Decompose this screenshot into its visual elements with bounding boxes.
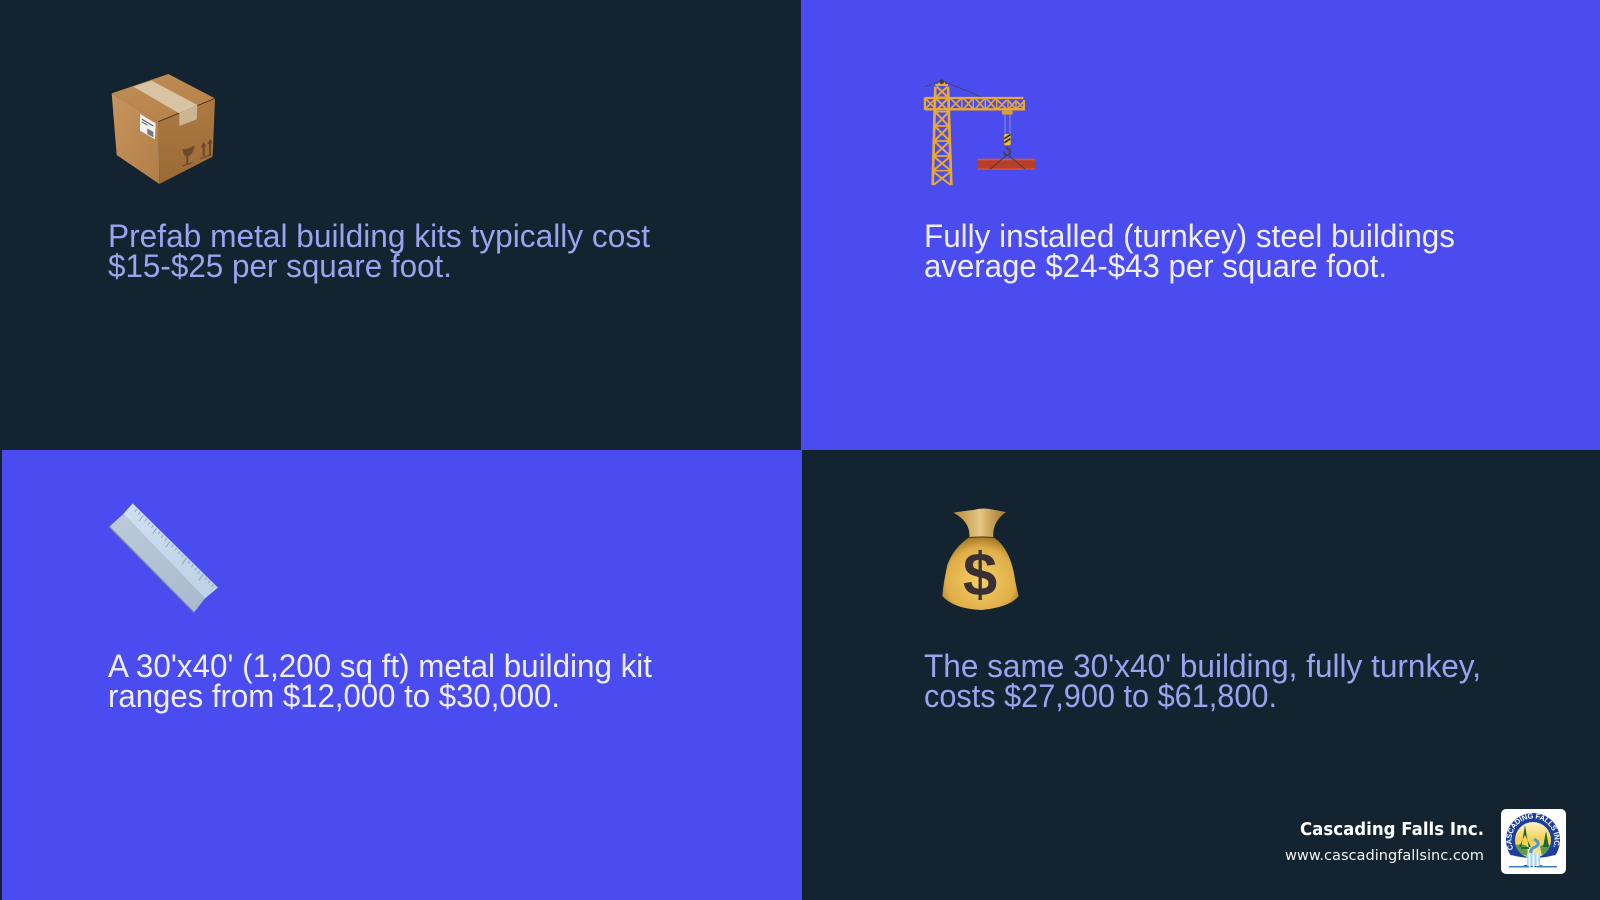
text: kit price per square foot: Prefab metal building kits typically cost xyxy=(108,218,650,254)
icon: money bag: $ xyxy=(963,540,997,609)
icon: construction crane xyxy=(924,79,1035,186)
panel: 30x40 turnkey cost xyxy=(802,450,1600,900)
icon: ruler xyxy=(109,504,218,613)
company brand text: www.cascadingfallsinc.com xyxy=(1285,848,1484,864)
text: kit price range xyxy=(108,648,652,714)
text: turnkey price per square foot xyxy=(924,218,1455,284)
panel: turnkey cost xyxy=(801,0,1600,450)
company logo xyxy=(1501,809,1566,874)
company brand text xyxy=(1285,820,1484,864)
icon: money bag xyxy=(942,508,1019,610)
panel: 30x40 kit cost xyxy=(2,450,802,900)
text: turnkey price range: The same 30'x40' building, fully turnkey, xyxy=(924,648,1481,684)
panel: kit cost xyxy=(2,0,802,450)
company brand text: Cascading Falls Inc. xyxy=(1300,820,1484,840)
text: kit price per square foot: $15-$25 per square foot. xyxy=(108,248,452,284)
icon: cardboard box xyxy=(112,74,215,184)
text: turnkey price range xyxy=(924,648,1481,714)
text: kit price range: A 30'x40' (1,200 sq ft) metal building kit xyxy=(108,648,652,684)
text: kit price range: ranges from $12,000 to $30,000. xyxy=(108,678,560,714)
text: turnkey price per square foot: average $24-$43 per square foot. xyxy=(924,248,1387,284)
text: kit price per square foot xyxy=(108,218,650,284)
company logo: CASCADING FALLS INC. xyxy=(1506,813,1560,850)
text: turnkey price range: costs $27,900 to $61,800. xyxy=(924,678,1277,714)
text: turnkey price per square foot: Fully installed (turnkey) steel buildings xyxy=(924,218,1455,254)
